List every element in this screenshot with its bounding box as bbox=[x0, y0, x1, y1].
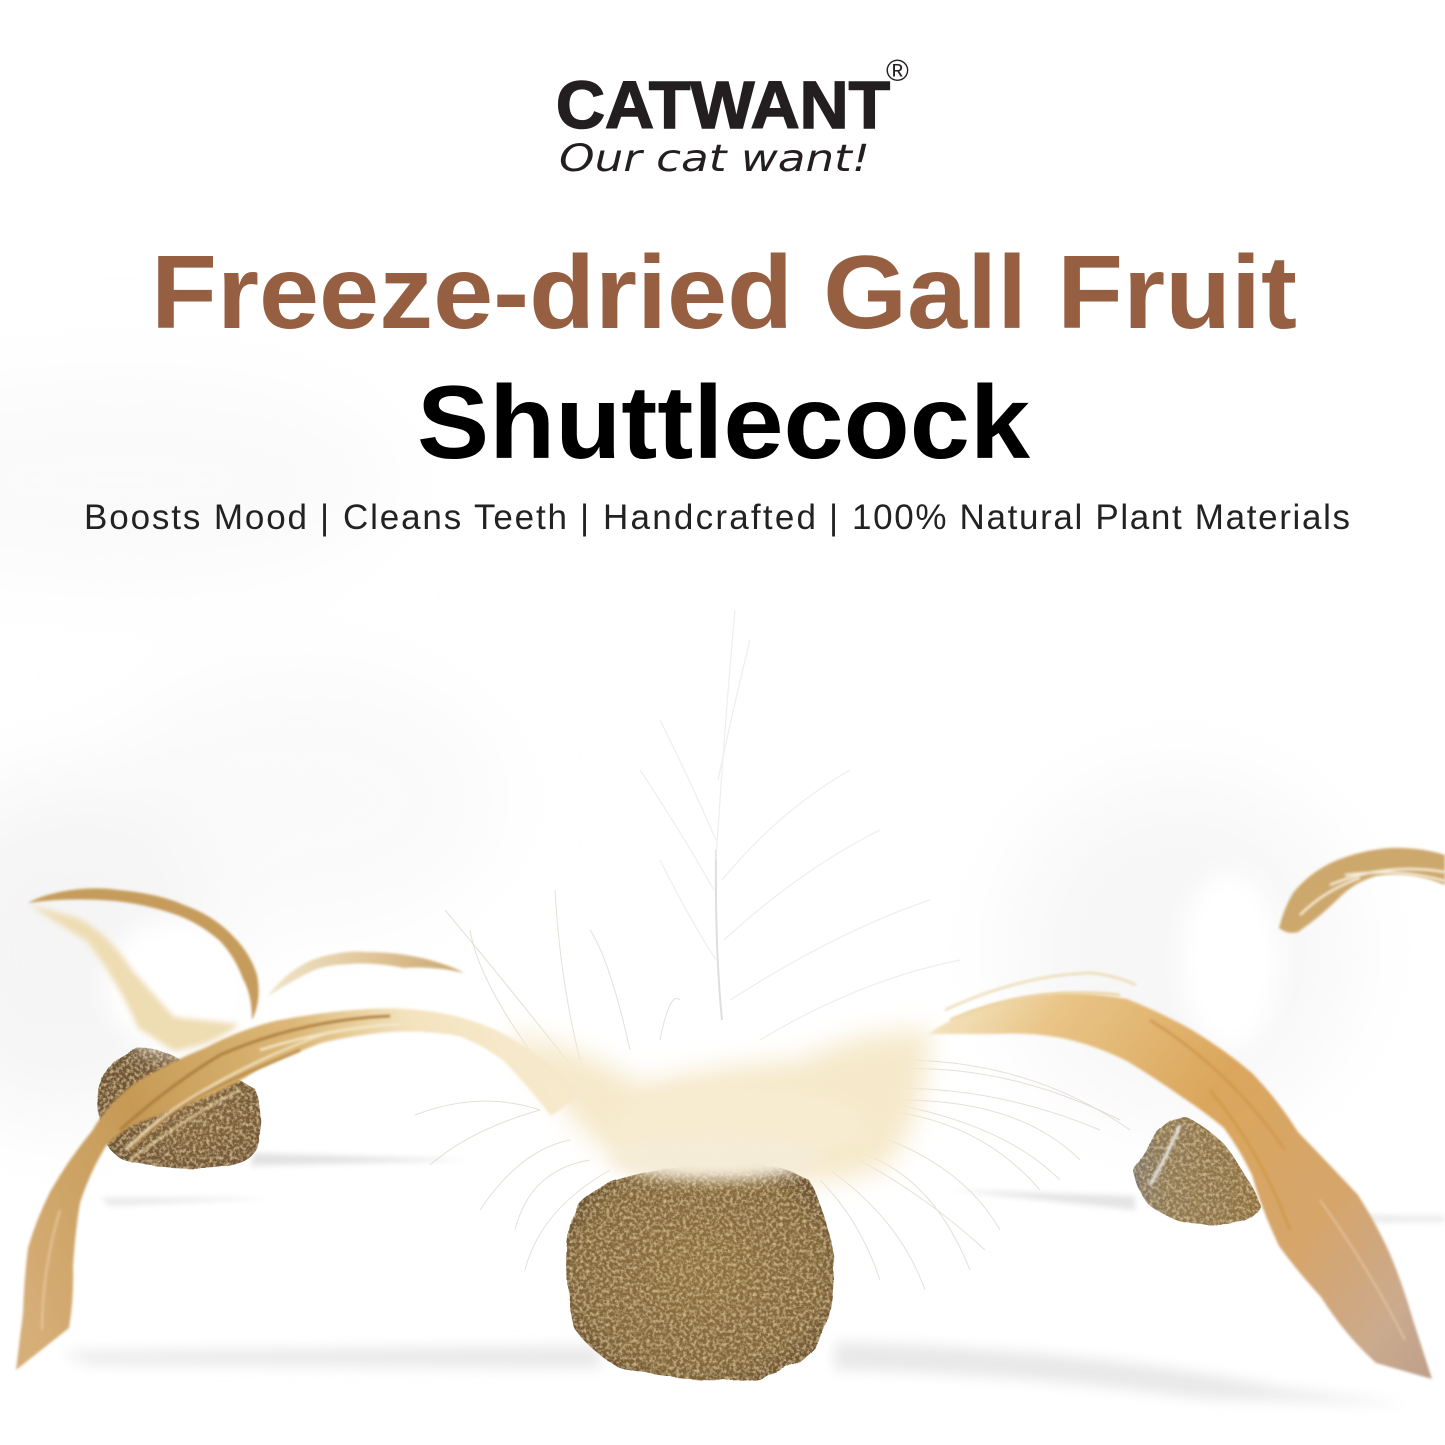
soft backdrop haze bbox=[0, 380, 1350, 1120]
brand name: CATWANT bbox=[556, 68, 890, 143]
product: left shuttlecock (background) bbox=[28, 888, 464, 1168]
right top feather strands bbox=[1300, 869, 1445, 915]
fine wisps bbox=[415, 890, 1130, 1290]
left long feather bbox=[16, 1008, 583, 1370]
white centre feather bbox=[590, 660, 930, 1100]
tagline: | bbox=[829, 498, 838, 537]
tagline: Cleans Teeth bbox=[343, 498, 567, 537]
product: right shuttlecock (background) bbox=[1134, 848, 1445, 1224]
tagline: Boosts Mood bbox=[84, 498, 307, 537]
grey feather hairs bbox=[640, 610, 960, 1040]
title line 1: Freeze-dried Gall Fruit bbox=[151, 235, 1297, 351]
floor shadows bbox=[60, 1153, 1445, 1404]
right top feather bbox=[1279, 848, 1445, 933]
tagline: Handcrafted bbox=[603, 498, 816, 537]
right ball bbox=[1134, 1118, 1261, 1224]
right feather wisps bbox=[945, 973, 1405, 1340]
product: centre shuttlecock bbox=[16, 610, 1432, 1380]
centre ball bbox=[567, 1162, 834, 1380]
right ball highlight bbox=[1150, 1125, 1180, 1185]
logo bbox=[556, 53, 909, 180]
tagline: | bbox=[320, 498, 329, 537]
left cream feather bbox=[30, 905, 239, 1051]
registered mark: ® bbox=[886, 53, 909, 88]
cream fluff core bbox=[610, 1085, 870, 1165]
cream fluff bbox=[505, 1030, 930, 1181]
tagline: 100% Natural Plant Materials bbox=[852, 498, 1350, 537]
right white fluff bbox=[1180, 870, 1280, 1050]
left ball bbox=[99, 1048, 260, 1168]
slogan: Our cat want! bbox=[559, 137, 870, 180]
left rear feather bbox=[268, 952, 464, 996]
title line 2: Shuttlecock bbox=[417, 365, 1030, 481]
ball top fluff bbox=[610, 1136, 820, 1180]
left feather strands bbox=[42, 1016, 400, 1330]
right long feather bbox=[928, 993, 1432, 1379]
tagline bbox=[84, 498, 1350, 537]
tagline: | bbox=[580, 498, 589, 537]
feather shaft bbox=[716, 850, 722, 1020]
left white fluff bbox=[105, 920, 245, 1050]
left arched feather bbox=[28, 888, 259, 1020]
